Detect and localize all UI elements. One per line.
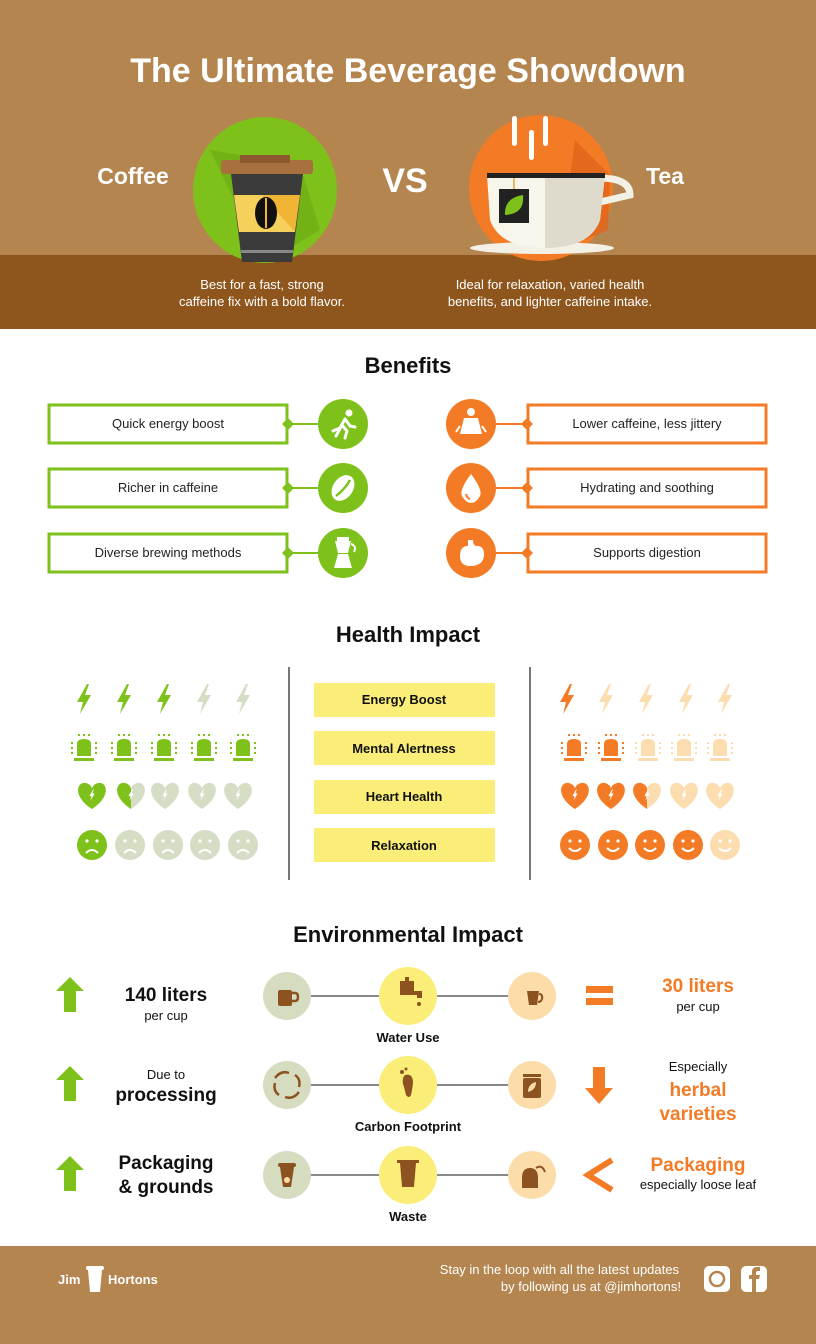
dividers bbox=[289, 667, 530, 880]
connector lines bbox=[287, 996, 532, 1175]
coffee caption: Best for a fast, strong bbox=[200, 277, 324, 292]
panel: coffee benefits bbox=[49, 399, 368, 578]
icon: moka pot bbox=[334, 537, 355, 568]
icon: coffee cup in green circle bbox=[193, 117, 337, 263]
tea env text: herbal bbox=[669, 1080, 727, 1101]
health labels bbox=[314, 683, 495, 862]
tea env text: Especially bbox=[669, 1059, 728, 1074]
coffee env text: Packaging bbox=[118, 1153, 214, 1174]
icon: runner bbox=[333, 410, 355, 438]
icon: drop bbox=[461, 474, 481, 503]
header background bbox=[0, 0, 816, 329]
health labels: Mental Alertness bbox=[352, 741, 456, 756]
label: Coffee: Coffee bbox=[97, 163, 169, 189]
coffee env text: processing bbox=[115, 1085, 217, 1106]
heading: Health Impact: Health Impact bbox=[336, 622, 481, 647]
health labels: Heart Health bbox=[366, 789, 442, 804]
env category labels: Carbon Footprint bbox=[355, 1119, 462, 1134]
panel: coffee benefits: Quick energy boost bbox=[112, 416, 224, 431]
orange comparison symbols bbox=[585, 986, 613, 1190]
icon: bean bbox=[327, 471, 359, 505]
coffee env text bbox=[115, 985, 217, 1198]
panel: coffee benefits: Richer in caffeine bbox=[118, 480, 218, 495]
logo: Jim Hortons: Jim bbox=[58, 1272, 80, 1287]
icon: relaxed person bbox=[456, 408, 486, 434]
panel: coffee benefits: Diverse brewing methods bbox=[95, 545, 242, 560]
icon: facebook bbox=[741, 1266, 767, 1292]
icon: tea cup in orange circle bbox=[469, 115, 630, 261]
VS: VS bbox=[382, 162, 428, 200]
coffee caption: caffeine fix with a bold flavor. bbox=[179, 294, 345, 309]
panel: tea benefits: Hydrating and soothing bbox=[580, 480, 714, 495]
tea env text: varieties bbox=[659, 1104, 737, 1125]
label: Tea: Tea bbox=[646, 163, 684, 189]
tea env text: Packaging bbox=[650, 1155, 746, 1176]
tea env text: 30 liters bbox=[662, 976, 734, 997]
heading: Benefits: Benefits bbox=[365, 353, 451, 378]
tea caption: Ideal for relaxation, varied health bbox=[456, 277, 644, 292]
footer text: Stay in the loop with all the latest updates bbox=[440, 1262, 679, 1277]
panel: tea benefits bbox=[446, 399, 766, 578]
health labels: Relaxation bbox=[371, 838, 437, 853]
coffee env text: Due to bbox=[147, 1067, 185, 1082]
coffee env text: 140 liters bbox=[125, 985, 207, 1006]
env circles bbox=[263, 967, 556, 1204]
footer bbox=[0, 1246, 816, 1344]
tea env text: per cup bbox=[676, 999, 720, 1014]
icon: stomach bbox=[460, 540, 484, 566]
tea env text: especially loose leaf bbox=[640, 1177, 757, 1192]
tea env text bbox=[640, 976, 757, 1192]
env category labels: Water Use bbox=[376, 1030, 440, 1045]
panel: tea benefits: Lower caffeine, less jittery bbox=[572, 416, 722, 431]
heading: Environmental Impact: Environmental Impact bbox=[293, 922, 524, 947]
tea caption: benefits, and lighter caffeine intake. bbox=[448, 294, 652, 309]
coffee env text: & grounds bbox=[118, 1177, 214, 1198]
logo: Jim Hortons bbox=[58, 1266, 158, 1292]
logo: Jim Hortons: Hortons bbox=[108, 1272, 158, 1287]
coffee health icons bbox=[72, 684, 258, 860]
footer text: by following us at @jimhortons! bbox=[501, 1279, 681, 1294]
icon: instagram bbox=[704, 1266, 730, 1292]
tea health icons bbox=[560, 684, 740, 860]
coffee env text: per cup bbox=[144, 1008, 188, 1023]
panel: tea benefits: Supports digestion bbox=[593, 545, 701, 560]
env category labels bbox=[355, 1030, 462, 1224]
health labels: Energy Boost bbox=[362, 692, 447, 707]
title: The Ultimate Beverage Showdown bbox=[130, 52, 686, 90]
green up arrows bbox=[56, 977, 84, 1191]
env category labels: Waste bbox=[389, 1209, 427, 1224]
